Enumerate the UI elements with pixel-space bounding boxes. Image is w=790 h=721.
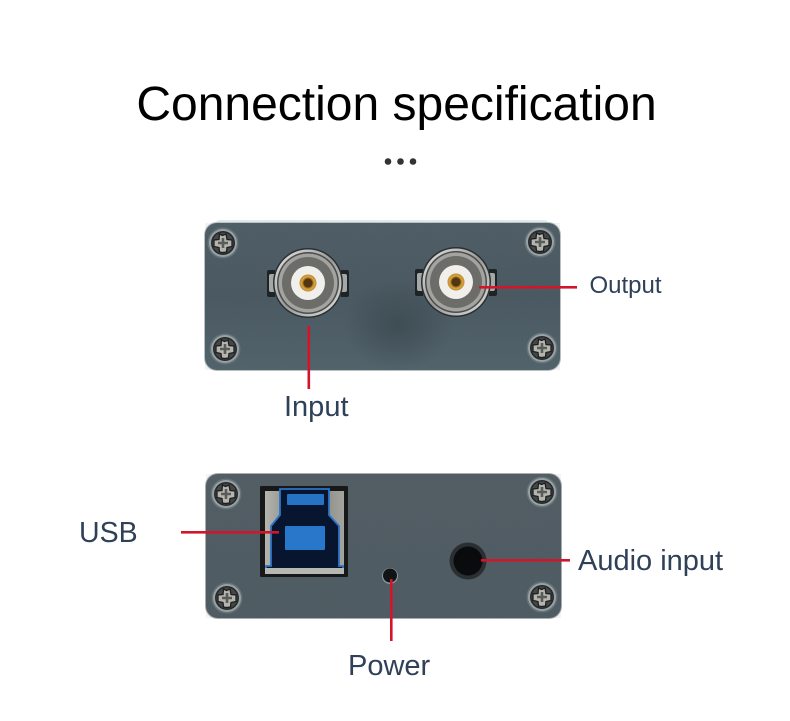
audio input jack	[450, 542, 486, 580]
screw: bottom left	[212, 582, 242, 614]
pointer: power	[390, 579, 393, 641]
screw: top left	[210, 478, 242, 510]
screw: top right	[524, 226, 556, 258]
power indicator hole	[382, 568, 398, 584]
panel: front of device with BNC connectors	[204, 220, 561, 371]
label: input: Input	[284, 391, 348, 423]
pointer: input	[308, 326, 310, 389]
screw: bottom right	[526, 332, 558, 364]
label: power: Power	[348, 650, 431, 682]
BNC input connector	[267, 248, 349, 318]
screw: top right	[526, 476, 558, 508]
USB type-B port	[260, 486, 348, 577]
pointer: USB	[181, 531, 279, 534]
decorative dots	[385, 158, 416, 165]
BNC output connector	[415, 247, 497, 317]
label: output: Output	[590, 272, 662, 299]
label: USB: USB	[79, 517, 138, 549]
panel: rear of device with USB, power and audio	[205, 473, 562, 619]
label: audio input: Audio input	[578, 545, 723, 577]
pointer: output	[479, 286, 577, 289]
pointer: audio input	[481, 559, 570, 562]
screw: top left	[208, 228, 238, 258]
screw: bottom right	[526, 582, 558, 612]
screw: bottom left	[210, 334, 240, 364]
title: Connection specification	[136, 78, 657, 131]
